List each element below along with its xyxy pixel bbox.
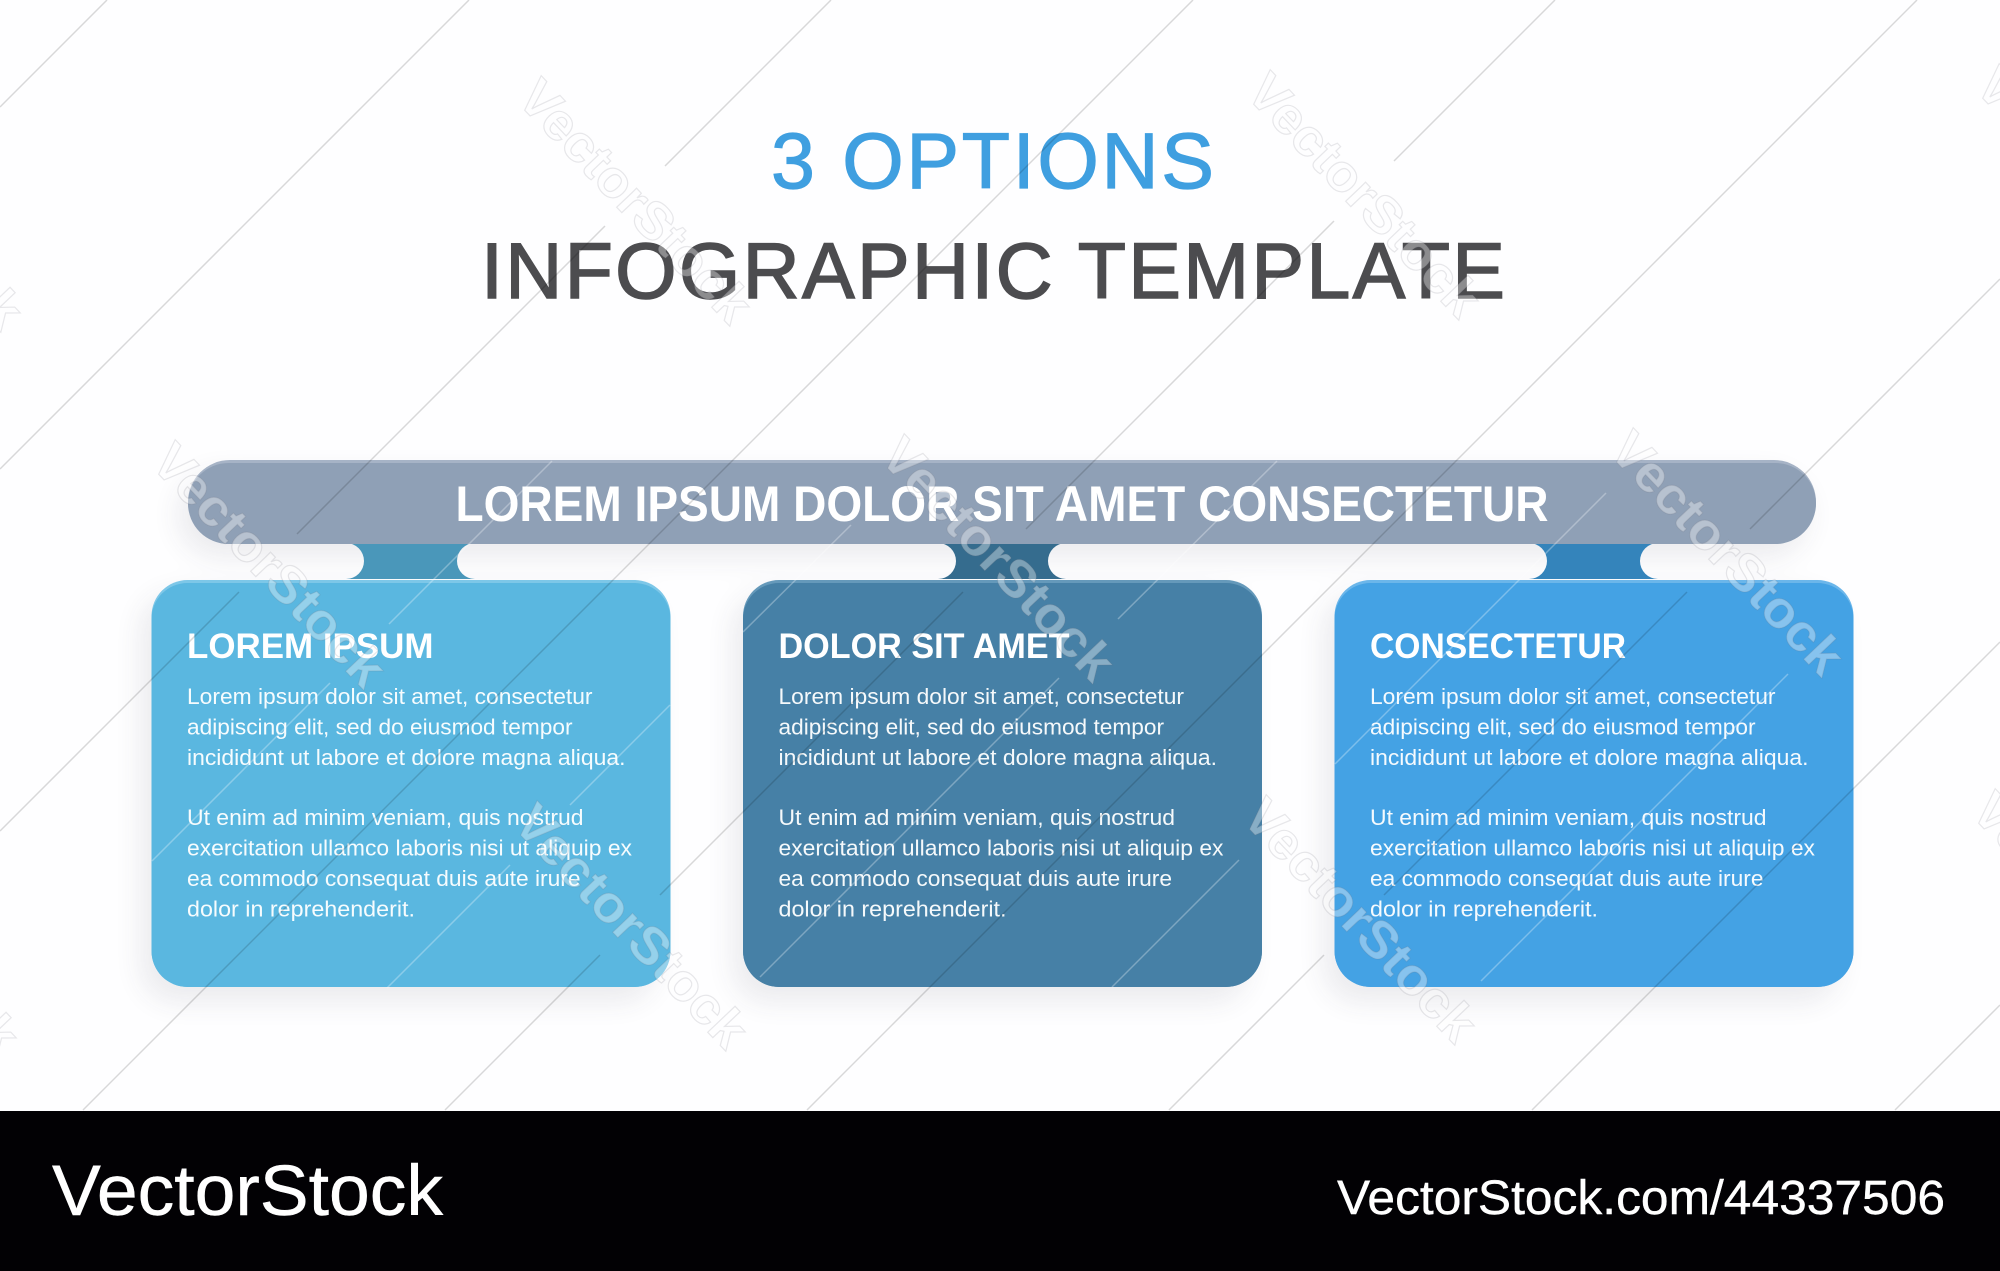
footer band — [0, 1111, 2000, 1271]
header bar label: LOREM IPSUM DOLOR SIT AMET CONSECTETUR — [456, 476, 1548, 532]
panel body text: ea commodo consequat duis aute irure — [1370, 866, 1764, 891]
panel body text: incididunt ut labore et dolore magna aliqua. — [1370, 745, 1808, 770]
panel: dolor sit amet — [743, 580, 1262, 987]
panel body text: adipiscing elit, sed do eiusmod tempor — [778, 714, 1164, 740]
panel heading: DOLOR SIT AMET — [778, 627, 1070, 666]
panel body text: incididunt ut labore et dolore magna aliqua. — [778, 745, 1217, 770]
panel body text: ea commodo consequat duis aute irure — [187, 866, 580, 891]
panel body text: Ut enim ad minim veniam, quis nostrud — [778, 805, 1175, 830]
panel body text: Ut enim ad minim veniam, quis nostrud — [187, 805, 584, 830]
panel body text: dolor in reprehenderit. — [1370, 896, 1598, 922]
panel body text: Ut enim ad minim veniam, quis nostrud — [1370, 805, 1766, 830]
panel body text: exercitation ullamco laboris nisi ut aliquip ex — [778, 836, 1224, 860]
connector: option 1 — [346, 543, 475, 579]
panel body text: Lorem ipsum dolor sit amet, consectetur — [187, 684, 592, 709]
panel body text — [1370, 684, 1815, 922]
panel body text: incididunt ut labore et dolore magna aliqua. — [187, 745, 626, 770]
panel body text — [187, 684, 632, 922]
connector: option 2 — [938, 543, 1066, 579]
watermark: VectorStock — [1598, 420, 1855, 687]
panel body text: Lorem ipsum dolor sit amet, consectetur — [778, 684, 1184, 709]
panel body text: dolor in reprehenderit. — [778, 896, 1006, 922]
title — [481, 116, 1505, 315]
panel: lorem ipsum — [152, 580, 670, 987]
panel body text: ea commodo consequat duis aute irure — [778, 866, 1172, 891]
header bar — [188, 460, 1816, 544]
panel heading: CONSECTETUR — [1370, 627, 1626, 666]
panel: consectetur — [1334, 580, 1854, 987]
title line: 3 options: 3 OPTIONS — [771, 116, 1214, 205]
panel body text: adipiscing elit, sed do eiusmod tempor — [1370, 714, 1756, 740]
watermark: VectorStock — [140, 432, 397, 699]
title line: infographic template: INFOGRAPHIC TEMPLATE — [481, 226, 1505, 315]
panel heading: LOREM IPSUM — [187, 627, 434, 666]
watermark: VectorStock — [502, 793, 759, 1060]
panel body text: exercitation ullamco laboris nisi ut aliquip ex — [1370, 836, 1815, 860]
footer logo text: VectorStock — [52, 1152, 444, 1231]
watermark — [0, 56, 2000, 1066]
watermark: VectorStock — [1235, 62, 1492, 329]
watermark: VectorStock — [869, 426, 1126, 693]
watermark: VectorStock — [506, 68, 763, 335]
connector: option 3 — [1529, 543, 1658, 579]
watermark: VectorStock — [1231, 787, 1488, 1054]
panel body text: dolor in reprehenderit. — [187, 896, 415, 922]
panel body text: adipiscing elit, sed do eiusmod tempor — [187, 714, 572, 740]
panel body text: exercitation ullamco laboris nisi ut aliquip ex — [187, 836, 632, 860]
panel body text: Lorem ipsum dolor sit amet, consectetur — [1370, 684, 1776, 709]
footer image id: VectorStock.com/44337506 — [1337, 1172, 1945, 1225]
panel body text — [778, 684, 1224, 922]
